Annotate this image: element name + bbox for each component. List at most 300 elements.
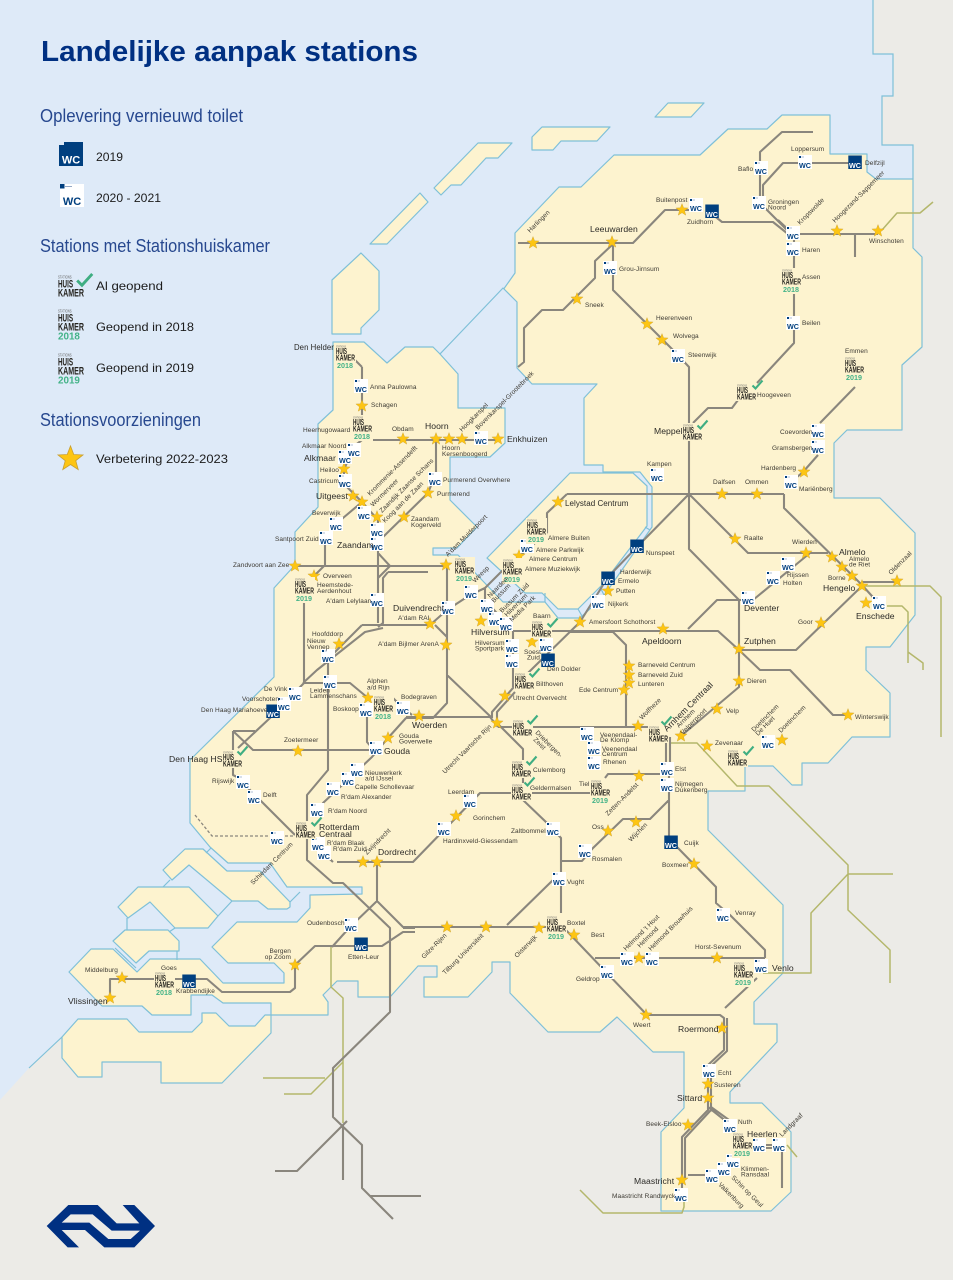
legend icon: huiskamer 2018: HUIS xyxy=(58,312,73,324)
Wadden island: Schiermonnikoog xyxy=(655,103,704,117)
station name labels: Almere Buiten xyxy=(548,535,590,542)
station name labels: Valkenburg xyxy=(717,1181,745,1210)
station name labels: Dordrecht xyxy=(378,847,417,857)
wc: Hilversum Sportpark: WC xyxy=(506,645,518,654)
station name labels: Weesp xyxy=(471,565,491,584)
station name labels: Purmerend Overwhere xyxy=(443,477,511,484)
wc: Rijssen: WC xyxy=(782,563,794,572)
wc 2019: Etten-Leur xyxy=(354,938,368,952)
wc: Nieuwerkerk a/d IJssel xyxy=(350,763,364,778)
station name labels: A'dam Lelylaan xyxy=(326,598,372,605)
wc: Elst: WC xyxy=(661,768,673,777)
wc: Veenendaal-De Klomp xyxy=(580,727,594,742)
mainland xyxy=(69,115,922,1211)
legend xyxy=(40,106,270,470)
station name labels: Kropswolde xyxy=(796,197,826,226)
legend icon: huiskamer 2018: STATIONS xyxy=(58,308,72,313)
wc: Helmond Brouwhuis: WC xyxy=(646,958,658,967)
station name labels: Venray xyxy=(735,910,756,917)
station name labels: Kersenboogerd xyxy=(442,451,488,458)
station name labels: Oisterwijk xyxy=(513,934,539,959)
legend text: Geopend in 2019: Geopend in 2019 xyxy=(96,361,194,375)
station name labels: Den Haag HS xyxy=(169,754,223,764)
station name labels: Nieuwerkerk xyxy=(365,770,402,777)
huiskamer: Boxtel 2019 xyxy=(546,915,567,941)
station name labels: Susteren xyxy=(714,1082,741,1089)
huiskamer: A'dam Muiderpoort 2019: STATIONS xyxy=(455,558,465,562)
station name labels: a/d Rijn xyxy=(367,684,390,692)
wc: Echt xyxy=(702,1064,716,1079)
wc: Hardinxveld-Giessendam: WC xyxy=(438,828,450,837)
wc: Baflo xyxy=(754,161,768,176)
wc: Gouda xyxy=(369,741,383,756)
station name labels: Bilthoven xyxy=(536,681,564,688)
wc: Nijkerk: WC xyxy=(592,601,604,610)
station name labels: Nijkerk xyxy=(608,601,629,608)
huiskamer: Heerlen 2019 xyxy=(732,1132,753,1158)
station name labels: Noord xyxy=(768,205,786,212)
station name labels: Almere Centrum xyxy=(529,556,577,563)
station name labels: Zaltbommel xyxy=(511,828,546,835)
station name labels: Ermelo xyxy=(618,578,639,585)
legend icon: WC 2019: WC xyxy=(62,154,80,166)
station name labels: Maastricht Randwyck xyxy=(612,1193,676,1200)
huiskamer: Emmen 2019 xyxy=(844,356,865,382)
wc: Rijswijk: WC xyxy=(237,781,249,790)
station name labels: Rosmalen xyxy=(592,856,622,863)
huiskamer: Boskoop 2018: STATIONS xyxy=(374,696,384,700)
station name labels: Lunteren xyxy=(638,681,665,688)
wc 2019: Den Haag Mariahoeve xyxy=(266,704,280,719)
huiskamer: Heemstede-Aerdenhout 2019: KAMER xyxy=(295,586,314,596)
station name labels: Zaandijk Zaanse Schans xyxy=(378,457,436,514)
huiskamer: Heerlen 2019: KAMER xyxy=(733,1141,752,1151)
station name labels: Barneveld Zuid xyxy=(638,672,683,679)
wc: Helmond 't Hout: WC xyxy=(621,958,633,967)
station name labels: Koog aan de Zaan xyxy=(381,481,425,524)
station name labels: Almere Parkwijk xyxy=(536,547,584,554)
legend icon: huiskamer 2019 xyxy=(58,352,84,387)
huiskamer: Heerhugowaard 2018: KAMER xyxy=(353,424,372,434)
Wadden island: Vlieland xyxy=(370,193,428,244)
wc: Echt: WC xyxy=(703,1070,715,1079)
huiskamer open: Meppel: KAMER xyxy=(683,432,702,442)
station name labels: Oss xyxy=(592,824,604,831)
wc: R'dam Alexander xyxy=(326,782,340,797)
huiskamer: Emmen 2019: 2019 xyxy=(846,373,862,382)
Wadden island: Terschelling xyxy=(434,143,512,195)
station name labels: Anna Paulowna xyxy=(370,384,417,391)
huiskamer: Venlo 2019 xyxy=(733,961,754,987)
wc: Hardinxveld-Giessendam xyxy=(437,822,451,837)
IJsselmeer and Markermeer xyxy=(433,288,652,618)
wc: Voorschoten: WC xyxy=(278,703,290,712)
station name labels: Goverwelle xyxy=(399,739,433,746)
wc: R'dam Zuid: WC xyxy=(318,852,330,861)
huiskamer: Almere Buiten 2019 xyxy=(526,518,547,544)
wc: R'dam Alexander: WC xyxy=(327,788,339,797)
huiskamer open: Utrecht Centraal: HUIS xyxy=(513,721,524,731)
huiskamer open: Den Haag HS: STATIONS xyxy=(223,750,233,754)
wc: Nijmegen Dukenberg xyxy=(660,778,674,793)
station name labels: Schagen xyxy=(371,402,398,409)
station name labels: Arnhem xyxy=(675,708,697,729)
wc 2019: Cuijk: WC xyxy=(665,841,677,850)
legend text: 2019: 2019 xyxy=(96,150,123,164)
station name labels: Alphen xyxy=(367,678,388,685)
station name labels: R'dam Zuid xyxy=(333,846,367,853)
wc: Maastricht Randwyck xyxy=(674,1188,688,1203)
station name labels: Venlo xyxy=(772,963,794,973)
wc: Nijmegen Dukenberg: WC xyxy=(661,784,673,793)
station name labels: Winschoten xyxy=(869,238,904,245)
Goeree island xyxy=(118,887,218,928)
station name labels: Velp xyxy=(726,708,739,715)
wc 2019: Delfzijl: WC xyxy=(849,161,861,170)
station name labels: Krabbendijke xyxy=(176,988,215,995)
wc: A'dam Lelylaan: WC xyxy=(371,599,383,608)
wc: Mariënberg xyxy=(784,475,798,490)
station name labels: Heiloo xyxy=(320,467,339,474)
wc: Naarden-Bussum: WC xyxy=(481,605,493,614)
station name labels: Zuidhorn xyxy=(687,219,714,226)
wc: Klimmen-Ransdaal: WC xyxy=(727,1160,739,1169)
station name labels: Weert xyxy=(633,1022,651,1029)
wc: Zaandam xyxy=(370,537,384,552)
huiskamer open: Meppel xyxy=(682,420,708,442)
station name labels: Putten xyxy=(616,588,636,595)
wc: Bodegraven xyxy=(396,701,410,716)
huiskamer open: Geldermalsen xyxy=(511,778,534,802)
huiskamer open: Culemborg xyxy=(511,756,536,779)
station name labels: Delfzijl xyxy=(865,160,885,167)
wc: Helmond 't Hout xyxy=(620,952,634,967)
huiskamer: Almere Muziekwijk 2019: KAMER xyxy=(503,567,522,577)
station name labels: Enschede xyxy=(856,611,895,621)
wc: Koog aan de Zaan xyxy=(370,523,384,538)
wc: Boskoop: WC xyxy=(360,709,372,718)
wc: Deventer xyxy=(741,591,755,606)
station name labels: Baarn xyxy=(533,613,551,620)
huiskamer: Boxtel 2019: STATIONS xyxy=(547,916,557,920)
huiskamer: Assen 2018: HUIS xyxy=(782,270,793,280)
wc: Grou-Jirnsum xyxy=(603,261,617,276)
station name labels: Zaandam xyxy=(337,540,374,550)
station name labels: Tilburg Universiteit xyxy=(441,932,486,976)
wc 2019: Krabbendijke xyxy=(182,974,196,989)
huiskamer: A'dam Muiderpoort 2019 xyxy=(454,557,475,583)
wc: Venlo xyxy=(754,959,768,974)
huiskamer: Heerlen 2019: 2019 xyxy=(734,1149,750,1158)
station name labels: Sittard xyxy=(677,1093,702,1103)
station name labels: Ransdaal xyxy=(741,1171,770,1178)
huiskamer: Goes 2018: STATIONS xyxy=(155,972,165,976)
huiskamer: Den Helder 2018: STATIONS xyxy=(336,344,346,348)
station name labels: Doetinchem xyxy=(777,704,808,734)
wc: Holten xyxy=(766,571,780,586)
huiskamer: Almere Buiten 2019: STATIONS xyxy=(527,518,537,522)
huiskamer open: Bilthoven: HUIS xyxy=(515,674,526,684)
station name labels: Hilversum xyxy=(475,640,505,647)
wc: Koog aan de Zaan: WC xyxy=(371,529,383,538)
station name labels: Horst-Sevenum xyxy=(695,944,741,951)
title: Landelijke aanpak stations xyxy=(41,36,418,68)
wc 2019: Cuijk xyxy=(664,836,678,850)
station name labels: Capelle Schollevaar xyxy=(355,784,415,791)
station name labels: Coevorden xyxy=(780,429,813,436)
railway network xyxy=(110,132,897,1219)
huiskamer open: Rotterdam Centraal: HUIS xyxy=(296,823,307,833)
wc: Valkenburg: WC xyxy=(706,1175,718,1184)
huiskamer open: Utrecht Centraal: STATIONS xyxy=(513,720,523,724)
wc 2019: Ermelo xyxy=(601,572,615,586)
station name labels: Haren xyxy=(802,247,820,254)
coast border lines xyxy=(29,0,913,1068)
station name labels: Veenendaal xyxy=(602,746,637,753)
wc: Leiden Lammenschans xyxy=(323,675,337,690)
wc: Hilversum Sportpark xyxy=(505,639,519,654)
wc 2019: Zuidhorn: WC xyxy=(706,210,718,219)
huiskamer open: Baarn xyxy=(531,618,558,639)
station name labels: Echt xyxy=(718,1070,731,1077)
wc: Purmerend Overwhere xyxy=(428,472,442,487)
station name labels: Bergen xyxy=(270,948,291,955)
station name labels: Bussum Zuid xyxy=(498,582,531,614)
wc: Venray xyxy=(716,908,730,923)
legend icon: WC 2019 xyxy=(59,142,83,166)
station name labels: Landgraaf xyxy=(778,1112,805,1138)
station name labels: Beek-Elsloo xyxy=(646,1121,682,1128)
station name labels: Emmen xyxy=(845,348,868,355)
station name labels: Middelburg xyxy=(85,967,118,974)
station name labels: Raalte xyxy=(744,535,764,542)
huiskamer open: Den Haag HS: HUIS xyxy=(223,752,234,762)
huiskamer: Venlo 2019: 2019 xyxy=(735,978,751,987)
station name labels: Velperpoort xyxy=(679,707,709,736)
station name labels: Woerden xyxy=(412,720,447,730)
station name labels: Ommen xyxy=(745,479,769,486)
station name labels: Helmond xyxy=(636,925,660,949)
wc 2019: Ermelo: WC xyxy=(602,577,614,586)
wc: Landgraaf xyxy=(772,1138,786,1153)
wc: R'dam Blaak: WC xyxy=(312,843,324,852)
station name labels: Roermond xyxy=(678,1024,719,1034)
huiskamer: Tiel 2019: HUIS xyxy=(591,781,602,791)
wc: Beilen: WC xyxy=(787,322,799,331)
huiskamer: Goes 2018: HUIS xyxy=(155,973,166,983)
huiskamer: Den Helder 2018: KAMER xyxy=(336,353,355,363)
station name labels: Gilze-Rijen xyxy=(420,932,449,960)
huiskamer: Heerlen 2019: STATIONS xyxy=(733,1132,743,1136)
huiskamer: Almere Muziekwijk 2019: HUIS xyxy=(503,560,514,570)
station name labels: Castricum xyxy=(309,478,339,485)
station name labels: Groningen xyxy=(768,199,799,206)
huiskamer: Venlo 2019: KAMER xyxy=(734,970,753,980)
station name labels: Meppel xyxy=(654,426,683,436)
station name labels: Zwijndrecht xyxy=(363,827,393,856)
wc: Bodegraven: WC xyxy=(397,707,409,716)
station name labels: Culemborg xyxy=(533,767,566,774)
huiskamer: A'dam Muiderpoort 2019: KAMER xyxy=(455,566,474,576)
huiskamer open: Zevenaar: STATIONS xyxy=(728,750,738,754)
huiskamer: Den Helder 2018: 2018 xyxy=(337,361,353,370)
station name labels: Rijswijk xyxy=(212,778,235,785)
huiskamer: A'dam Muiderpoort 2019: HUIS xyxy=(455,559,466,569)
huiskamer open: Baarn: STATIONS xyxy=(532,620,542,624)
station name labels: Kogerveld xyxy=(411,522,441,529)
wc: Bussum Zuid: WC xyxy=(489,618,501,627)
station name labels: Geldermalsen xyxy=(530,785,572,792)
station name labels: Mariënberg xyxy=(799,486,833,493)
wc: Nieuw Vennep: WC xyxy=(322,655,334,664)
station name labels: Heemstede- xyxy=(317,582,353,589)
huiskamer open: Bilthoven: KAMER xyxy=(515,681,534,691)
station name labels: Zevenaar xyxy=(715,740,744,747)
station name labels: Bussum xyxy=(490,583,512,604)
station name labels: Zetten-Andelst xyxy=(604,782,640,817)
station name labels: Boskoop xyxy=(333,706,359,713)
wc: Duivendrecht: WC xyxy=(442,607,454,616)
station name labels: Klimmen- xyxy=(741,1166,769,1173)
wc: Buitenpost xyxy=(689,198,703,213)
huiskamer: Goes 2018: KAMER xyxy=(155,980,174,990)
Wadden island: Ameland xyxy=(532,127,610,150)
huiskamer open: Arnhem Centraal: KAMER xyxy=(649,734,668,744)
legend icon: huiskamer open: STATIONS xyxy=(58,274,72,279)
station name labels: Obdam xyxy=(392,426,414,433)
station name labels: Alkmaar xyxy=(304,453,336,463)
station name labels: Utrecht Vaartsche Rijn xyxy=(441,723,494,775)
station name labels: Gouda xyxy=(399,733,419,740)
legend icon: huiskamer open xyxy=(58,274,92,300)
Stationshuiskamer logos xyxy=(154,268,865,1158)
station name labels: Leiden xyxy=(310,688,330,694)
wc: Steenwijk xyxy=(671,349,685,364)
huiskamer open: Culemborg: STATIONS xyxy=(512,760,522,764)
station name labels: Overveen xyxy=(323,573,352,580)
wc: Steenwijk: WC xyxy=(672,355,684,364)
wc: Rijssen xyxy=(781,557,795,572)
wc: Santpoort Zuid xyxy=(319,531,333,546)
wc 2019: Zuidhorn xyxy=(705,204,719,219)
huiskamer: Heemstede-Aerdenhout 2019: STATIONS xyxy=(295,578,305,582)
huiskamer: Boskoop 2018: HUIS xyxy=(374,697,385,707)
huiskamer: Boxtel 2019: HUIS xyxy=(547,917,558,927)
huiskamer: Boxtel 2019: 2019 xyxy=(548,932,564,941)
station name labels: Den Dolder xyxy=(547,666,581,673)
station name labels: Best xyxy=(591,932,604,939)
station name labels: Elst xyxy=(675,766,686,773)
wc: Kampen xyxy=(650,468,664,483)
huiskamer: Tiel 2019: STATIONS xyxy=(591,780,601,784)
wc: Purmerend Overwhere: WC xyxy=(429,478,441,487)
wc: Gramsbergen: WC xyxy=(812,446,824,455)
station name labels: Almelo xyxy=(849,556,869,563)
station name labels: Leeuwarden xyxy=(590,224,638,234)
wc: R'dam Noord: WC xyxy=(311,809,323,818)
station name labels: Harlingen xyxy=(526,209,552,234)
wc: Beverwijk xyxy=(329,517,343,532)
wc: Gouda: WC xyxy=(370,747,382,756)
huiskamer: Boskoop 2018: KAMER xyxy=(374,704,393,714)
wc: Delft xyxy=(247,790,261,805)
station name labels: Voorschoten xyxy=(242,696,279,703)
wc: De Vink xyxy=(288,687,302,702)
wc: Alkmaar: WC xyxy=(339,456,351,465)
huiskamer open: Hoogeveen: KAMER xyxy=(737,392,756,402)
huiskamer open: Meppel: STATIONS xyxy=(683,424,693,428)
huiskamer open: Bilthoven xyxy=(514,668,540,691)
wc: Doetinchem De Huet: WC xyxy=(762,741,774,750)
wc: Gramsbergen xyxy=(811,440,825,455)
wc: Groningen xyxy=(786,226,800,241)
wc: Venray: WC xyxy=(717,914,729,923)
station name labels: Dieren xyxy=(747,678,767,685)
wc 2019: Etten-Leur: WC xyxy=(355,943,367,952)
huiskamer: Almere Buiten 2019: 2019 xyxy=(528,535,544,544)
wc: Valkenburg xyxy=(705,1169,719,1184)
station name labels: Beilen xyxy=(802,320,821,327)
wc: Mariënberg: WC xyxy=(785,481,797,490)
huiskamer open: Rotterdam Centraal: KAMER xyxy=(296,830,315,840)
station name labels: Steenwijk xyxy=(688,352,717,359)
huiskamer: Goes 2018: 2018 xyxy=(156,988,172,997)
wc: Beilen xyxy=(786,316,800,331)
station name labels: a/d IJssel xyxy=(365,776,394,783)
wc: Groningen Noord xyxy=(752,196,766,211)
station name labels: A'dam Muiderpoort xyxy=(444,514,489,558)
huiskamer: Tiel 2019: KAMER xyxy=(591,788,610,798)
wc 2019: Den Haag Mariahoeve: WC xyxy=(267,710,279,719)
legend icon: WC 2020-2021 xyxy=(60,184,84,208)
wc: Maastricht Randwyck: WC xyxy=(675,1194,687,1203)
wc: Nieuw Vennep xyxy=(321,649,335,664)
wc: Rosmalen xyxy=(578,844,592,859)
wc: R'dam Noord xyxy=(310,803,324,818)
huiskamer: Venlo 2019: STATIONS xyxy=(734,962,744,966)
station name labels: Dalfsen xyxy=(713,479,736,486)
station name labels: Hoogkarspel xyxy=(458,402,490,433)
station name labels: Boxmeer xyxy=(662,862,689,869)
huiskamer open: Hoogeveen: HUIS xyxy=(737,385,748,395)
station name labels: Zandvoort aan Zee xyxy=(233,562,290,569)
wc: Leiden Lammenschans: WC xyxy=(324,681,336,690)
huiskamer: Assen 2018: 2018 xyxy=(783,285,799,294)
wc: Schin op Geul xyxy=(717,1162,731,1177)
wc: Capelle Schollevaar xyxy=(341,772,355,787)
huiskamer open: Rotterdam Centraal: STATIONS xyxy=(296,822,306,826)
wc: Castricum: WC xyxy=(339,480,351,489)
station name labels: Hoofddorp xyxy=(312,631,343,638)
wc: Alkmaar Noord xyxy=(347,443,361,458)
huiskamer: Venlo 2019: HUIS xyxy=(734,963,745,973)
station name labels: Hoorn xyxy=(442,445,460,452)
wc 2019: Den Dolder xyxy=(541,654,555,668)
station name labels: Hoogeveen xyxy=(757,392,791,399)
huiskamer open: Den Haag HS xyxy=(222,746,248,769)
station name labels: Oldenzaal xyxy=(887,550,914,576)
huiskamer: Almere Muziekwijk 2019: 2019 xyxy=(504,575,520,584)
heading: station living rooms: Stations met Stationshuiskamer xyxy=(40,236,270,256)
huiskamer: Almere Muziekwijk 2019: STATIONS xyxy=(503,558,513,562)
huiskamer open: Utrecht Centraal xyxy=(512,716,538,738)
wc: Baflo: WC xyxy=(755,167,767,176)
station name labels: Zaandam xyxy=(411,516,439,523)
huiskamer: Heerhugowaard 2018: HUIS xyxy=(353,417,364,427)
huiskamer open: Culemborg: HUIS xyxy=(512,762,523,772)
huiskamer open: Baarn: KAMER xyxy=(532,629,551,639)
station name labels: Utrecht Overvecht xyxy=(513,695,567,702)
